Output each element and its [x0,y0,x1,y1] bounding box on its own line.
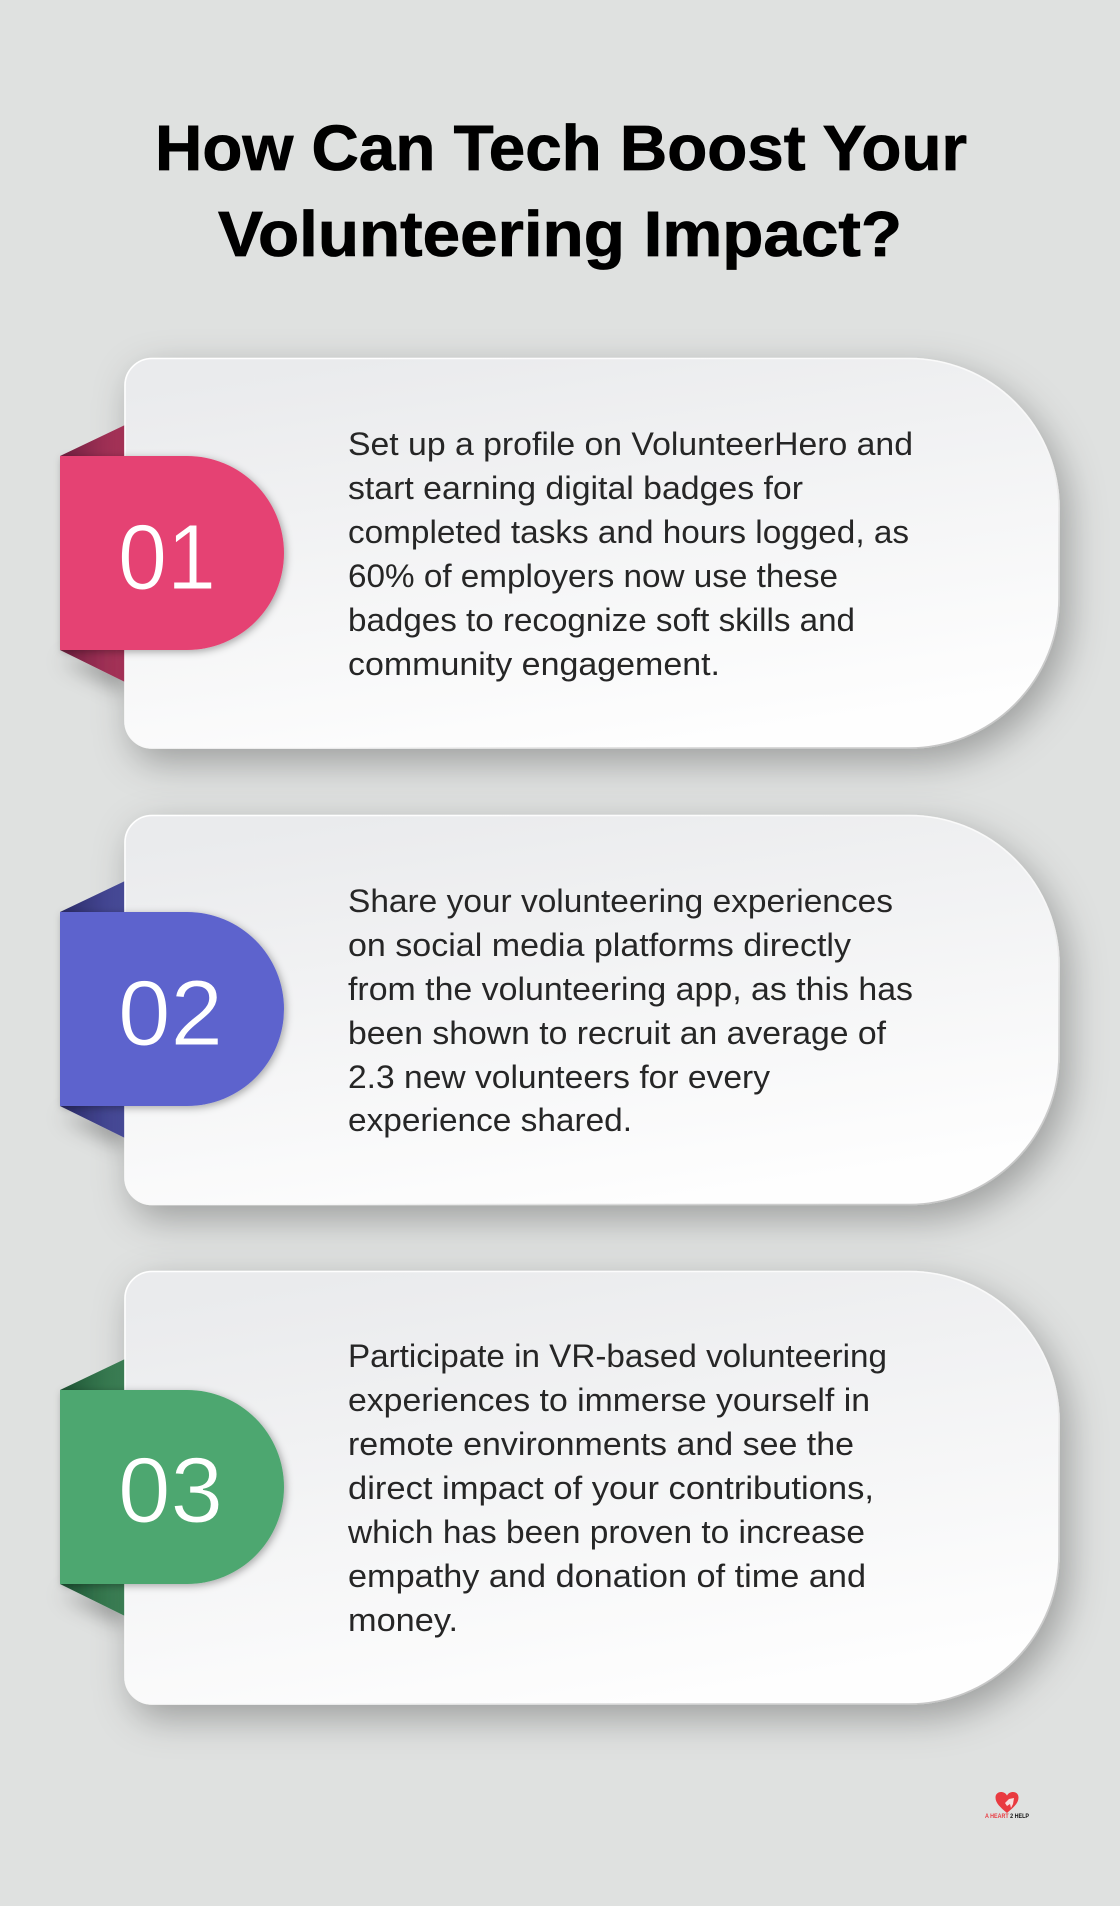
badge: 02 [60,912,284,1106]
card: step 03 [125,1272,1059,1704]
text: step 02: been shown to recruit an average of [348,1015,887,1051]
panel: step 01 [60,358,1059,748]
card: step 02 [125,816,1059,1204]
text: step 03: which has been proven to increase [347,1514,865,1550]
logo wordmark: A HEART 2 HELP [985,1813,1030,1820]
text: step 01 [348,426,913,682]
panel: step 02 [60,816,1059,1204]
text: step 02: Share your volunteering experiences [348,883,893,919]
text: step 03 [347,1338,887,1638]
title [155,112,967,270]
badge: 02: 02 [118,961,223,1065]
ribbon fold: step 02 [60,881,125,1138]
ribbon fold: step 03 [60,1359,125,1616]
text: step 01: Set up a profile on VolunteerHero and [348,426,913,462]
badge: 03 [60,1390,284,1584]
text: step 03: money. [348,1602,458,1638]
text: step 01: community engagement. [348,646,720,682]
text: step 01: completed tasks and hours logged, as [348,514,909,550]
badge: 01: 01 [118,505,216,609]
ribbon fold: step 01 [60,425,125,682]
text: step 01: badges to recognize soft skills and [348,602,855,638]
text: step 03: remote environments and see the [348,1426,854,1462]
text: step 03: Participate in VR-based volunteering [348,1338,887,1374]
text: step 03: direct impact of your contributions, [348,1470,874,1506]
logo: A Heart 2 Help [985,1792,1030,1820]
card: step 01 [125,358,1059,748]
text: step 02 [348,883,913,1138]
title: How Can Tech Boost Your [155,112,967,184]
badge: 01 [60,456,284,650]
text: step 03: experiences to immerse yourself in [348,1382,870,1418]
title: Volunteering Impact? [218,198,902,270]
icon: heart [996,1792,1018,1813]
text: step 01: start earning digital badges for [348,470,803,506]
text: step 01: 60% of employers now use these [348,558,838,594]
panel: step 03 [60,1272,1059,1704]
text: step 02: on social media platforms directly [348,927,852,963]
text: step 02: experience shared. [348,1102,632,1138]
text: step 02: from the volunteering app, as this has [348,971,913,1007]
text: step 02: 2.3 new volunteers for every [348,1059,771,1095]
text: step 03: empathy and donation of time and [348,1558,866,1594]
badge: 03: 03 [118,1438,223,1542]
